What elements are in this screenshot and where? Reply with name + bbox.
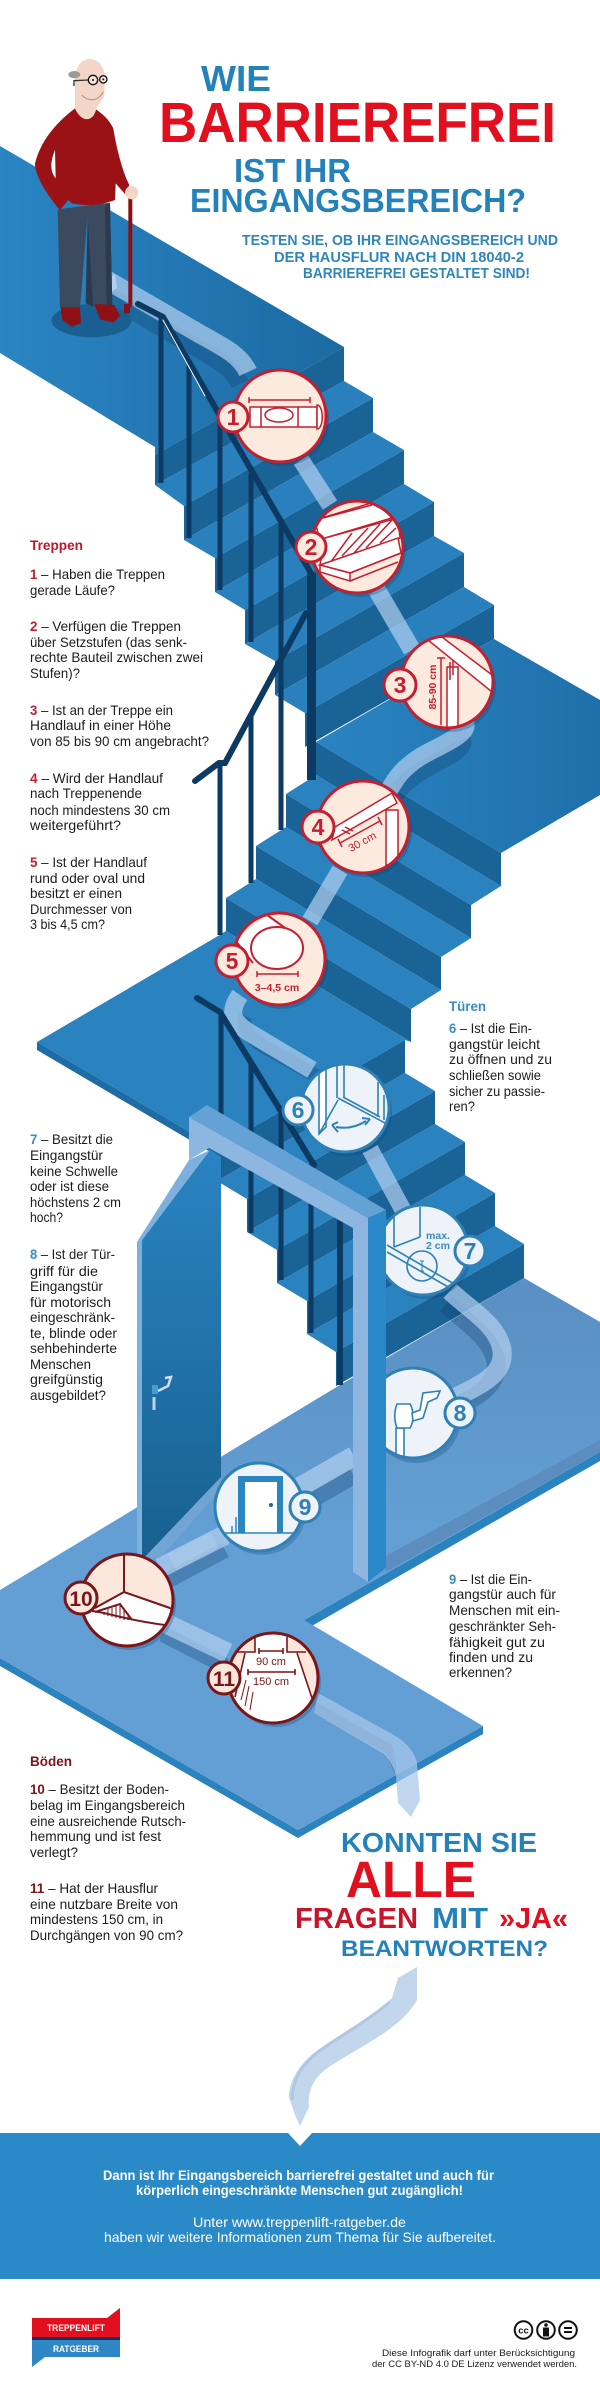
circle 7: door threshold: 2 cm [426, 1240, 450, 1252]
text block: Treppen questions: noch mindestens 30 cm [30, 803, 170, 818]
text block: Treppen questions: Stufen)? [30, 666, 80, 681]
licence note: Diese Infografik darf unter Berücksichtigung [382, 2347, 575, 2358]
circle 4: handrail extension: 4 [312, 814, 325, 840]
text block: Türen questions 7 and 8: für motorisch [30, 1295, 111, 1310]
text block: Türen questions 6: 6 – Ist die Ein- [449, 1021, 532, 1036]
text block: Treppen questions: nach Treppenende [30, 786, 142, 801]
route ribbon [99, 274, 502, 1817]
title: EINGANGSBEREICH? [190, 182, 526, 219]
text block: Böden questions: Durchgängen von 90 cm? [30, 1928, 183, 1943]
text block: Türen questions 7 and 8: 7 – Besitzt die [30, 1132, 113, 1147]
text block: Türen questions 7 and 8: eingeschränk- [30, 1310, 115, 1325]
text block: Türen questions 6: sicher zu passie- [449, 1084, 545, 1099]
circle 11: hall width: 150 cm [253, 1676, 289, 1688]
text block: Türen questions 7 and 8: te, blinde oder [30, 1326, 117, 1341]
closing question: »JA« [499, 1903, 568, 1935]
circle 3: handrail height: 85-90 cm [427, 665, 439, 709]
text block: Treppen questions: 3 bis 4,5 cm? [30, 917, 105, 932]
text block: Böden questions: hemmung und ist fest [30, 1829, 161, 1844]
text block: Treppen questions: über Setzstufen (das senk- [30, 635, 187, 650]
text block: Türen question 9: geschränkter Seh- [449, 1619, 556, 1634]
text block: Böden questions: verlegt? [30, 1845, 78, 1860]
circle 7: door threshold: max. [426, 1230, 450, 1242]
handrails and balusters [138, 304, 340, 1385]
circle 10: floor covering [65, 1553, 176, 1660]
text block: Treppen questions: rechte Bauteil zwischen zwei [30, 650, 203, 665]
circle 3: handrail height [384, 634, 496, 732]
text block: Treppen questions: 4 – Wird der Handlauf [30, 771, 163, 786]
title: BARRIEREFREI [159, 91, 556, 155]
closing question [295, 1827, 568, 1961]
logo: TREPPENLIFT [47, 2323, 105, 2334]
text block: Treppen questions: 2 – Verfügen die Treppen [30, 619, 181, 634]
entrance hall floor [0, 1278, 600, 1838]
subtitle [242, 232, 558, 282]
circle 4: handrail extension [302, 781, 412, 877]
text block: Türen question 9: gangstür auch für [449, 1587, 556, 1602]
circle 5: handrail diameter: 5 [226, 948, 239, 974]
text block: Türen questions 7 and 8: sehbehinderte [30, 1341, 117, 1356]
circle 1: spirit level: 1 [227, 404, 240, 430]
text block: Treppen questions: Durchmesser von [30, 902, 132, 917]
text block: Böden questions: belag im Eingangsbereich [30, 1798, 185, 1813]
logo [32, 2308, 120, 2367]
conclusion banner: Dann ist Ihr Eingangsbereich barrierefrei gestaltet und auch für [103, 2167, 495, 2183]
text block: Türen questions 6: gangstür leicht [449, 1037, 540, 1052]
circle 8: door handle: 8 [454, 1400, 467, 1426]
text block: Treppen questions: rund oder oval und [30, 871, 145, 886]
closing question: BEANTWORTEN? [341, 1936, 548, 1961]
lower route ribbon arrow [289, 1967, 417, 2126]
text block: Türen questions 7 and 8: Eingangstür [30, 1148, 103, 1163]
circle 7: door threshold [378, 1205, 485, 1299]
text block: Türen questions 6: ren? [449, 1099, 475, 1114]
licence note: der CC BY-ND 4.0 DE Lizenz verwendet werden. [372, 2358, 577, 2369]
text block: Türen questions 7 and 8: griff für die [30, 1264, 98, 1279]
text block: Türen questions 7 and 8: 8 – Ist der Tür- [30, 1247, 115, 1262]
text block: Türen question 9: Menschen mit ein- [449, 1603, 560, 1618]
first staircase flight [0, 146, 494, 747]
subtitle: DER HAUSFLUR NACH DIN 18040-2 [274, 249, 524, 266]
circle 10: floor covering: 10 [69, 1588, 93, 1611]
circle 5: handrail diameter: 3–4,5 cm [255, 982, 299, 994]
circle 1: spirit level [218, 370, 329, 466]
circle 2: riser cross-section [296, 495, 410, 597]
second staircase flight [226, 742, 501, 1042]
text block: Böden questions: eine ausreichende Rutsch- [30, 1814, 186, 1829]
circle 6: door opening [283, 1064, 392, 1156]
conclusion banner: haben wir weitere Informationen zum Thema für Sie aufbereitet. [104, 2229, 496, 2245]
subtitle: TESTEN SIE, OB IHR EINGANGSBEREICH UND [242, 232, 558, 249]
conclusion banner [0, 2133, 600, 2279]
text block: Türen questions 6: zu öffnen und zu [449, 1052, 552, 1067]
text block: Türen questions 7 and 8 [30, 1132, 121, 1403]
circle 9: visible door [215, 1463, 320, 1555]
text block: Türen questions 7 and 8: Menschen [30, 1357, 91, 1372]
text block: Treppen questions: 1 – Haben die Treppen [30, 567, 165, 582]
licence icons: cc [518, 2326, 529, 2336]
text block: Böden questions: Böden [30, 1753, 72, 1769]
text block: Türen questions 6 [449, 998, 552, 1114]
licence icons [515, 2321, 577, 2339]
text block: Treppen questions: besitzt er einen [30, 886, 122, 901]
text block: Treppen questions: 5 – Ist der Handlauf [30, 855, 147, 870]
text block: Türen questions 7 and 8: ausgebildet? [30, 1388, 106, 1403]
text block: Türen questions 7 and 8: keine Schwelle [30, 1164, 118, 1179]
conclusion banner: körperlich eingeschränkte Menschen gut zugänglich! [136, 2182, 463, 2198]
circle 5: handrail diameter [216, 913, 328, 1009]
ribbon over door threshold [172, 1540, 214, 1562]
logo: RATGEBER [53, 2344, 99, 2355]
circle 11: hall width [208, 1633, 321, 1727]
text block: Böden questions [30, 1753, 186, 1943]
title: IST IHR [234, 152, 351, 189]
closing question: MIT [432, 1903, 488, 1935]
text block: Türen question 9 [449, 1572, 560, 1680]
circle 9: visible door: 9 [299, 1494, 311, 1520]
left landing [37, 931, 411, 1156]
text block: Treppen questions: weitergeführt? [29, 818, 121, 833]
circle 7: door threshold: 7 [464, 1238, 476, 1264]
door leaf [137, 1150, 221, 1560]
licence note [372, 2347, 577, 2369]
third staircase flight [217, 1040, 524, 1386]
circle 4: handrail extension: 30 cm [347, 830, 379, 855]
text block: Türen questions 6: Türen [449, 998, 486, 1014]
subtitle: BARRIEREFREI GESTALTET SIND! [303, 265, 530, 282]
text block: Treppen questions: von 85 bis 90 cm angebracht? [30, 734, 209, 749]
circle 8: door handle [386, 1366, 476, 1463]
text block: Türen questions 6: schließen sowie [449, 1068, 541, 1083]
text block: Türen questions 7 and 8: höchstens 2 cm [30, 1195, 121, 1210]
title: WIE [201, 58, 271, 99]
middle landing [316, 639, 600, 853]
text block: Türen questions 7 and 8: greifgünstig [30, 1372, 103, 1387]
circle 2: riser cross-section: 2 [305, 534, 317, 560]
text block: Türen question 9: finden und zu [449, 1650, 533, 1665]
conclusion banner: Unter www.treppenlift-ratgeber.de [193, 2214, 406, 2230]
circle 3: handrail height: 3 [394, 672, 406, 698]
circle 11: hall width: 90 cm [256, 1656, 286, 1668]
text block: Türen questions 7 and 8: hoch? [30, 1210, 63, 1225]
person with walking stick [35, 59, 138, 337]
text block: Treppen questions: 3 – Ist an der Treppe ein [30, 703, 173, 718]
title [159, 58, 556, 219]
closing question: KONNTEN SIE [341, 1827, 537, 1858]
text block: Türen question 9: fähigkeit gut zu [449, 1635, 545, 1650]
circle 6: door opening: 6 [292, 1097, 304, 1123]
text block: Treppen questions: Handlauf in einer Höhe [30, 718, 171, 733]
closing question: FRAGEN [295, 1903, 418, 1935]
text block: Türen questions 7 and 8: Eingangstür [30, 1279, 103, 1294]
text block: Treppen questions: Treppen [30, 537, 83, 553]
text block: Türen questions 7 and 8: oder ist diese [30, 1179, 109, 1194]
text block: Treppen questions [29, 537, 209, 932]
circle 11: hall width: 11 [213, 1668, 235, 1691]
text block: Treppen questions: gerade Läufe? [30, 583, 115, 598]
text block: Böden questions: mindestens 150 cm, in [30, 1912, 163, 1927]
door frame [189, 1105, 386, 1582]
text block: Böden questions: eine nutzbare Breite von [30, 1897, 178, 1912]
text block: Türen question 9: 9 – Ist die Ein- [449, 1572, 532, 1587]
text block: Böden questions: 11 – Hat der Hausflur [30, 1881, 158, 1896]
text block: Türen question 9: erkennen? [449, 1665, 512, 1680]
closing question: ALLE [346, 1851, 476, 1908]
text block: Böden questions: 10 – Besitzt der Boden- [30, 1782, 169, 1797]
